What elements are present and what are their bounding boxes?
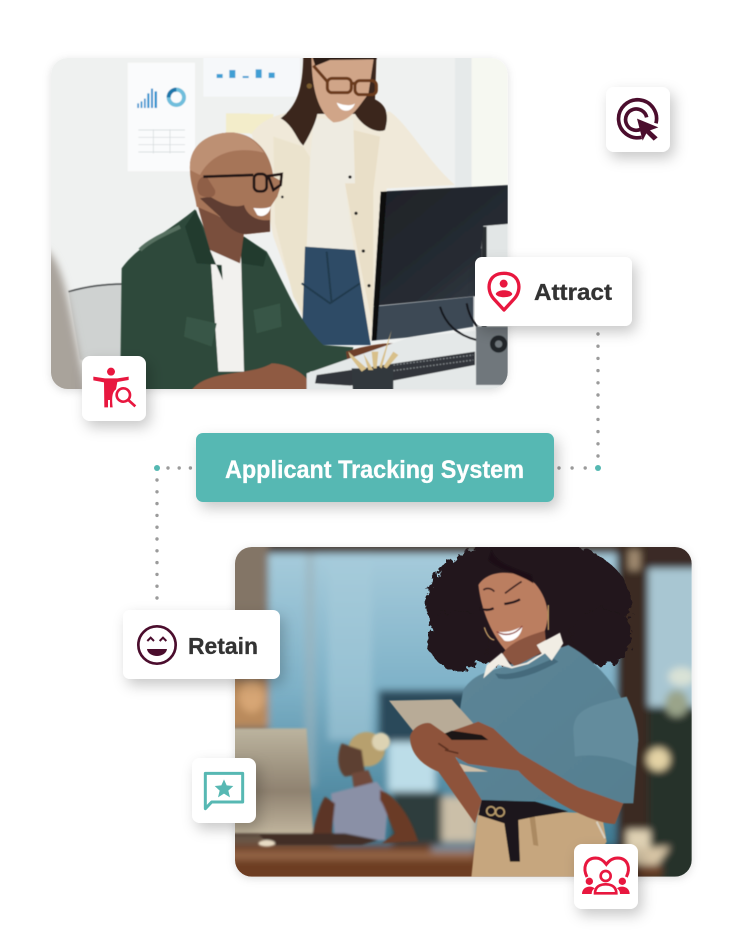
icon card: person with magnifier bbox=[82, 356, 146, 421]
desk and monitor bbox=[306, 184, 508, 389]
icon card: cursor target bbox=[606, 87, 670, 152]
icon card: star speech bubble bbox=[192, 758, 256, 823]
blurred office background bbox=[235, 547, 692, 877]
connector: left dotted line from system box to Retain bbox=[154, 465, 191, 608]
central box: Applicant Tracking System: Applicant Tracking System bbox=[225, 456, 524, 484]
photo: man and woman at a computer bbox=[40, 50, 523, 400]
chair bbox=[68, 284, 123, 360]
label card: Retain bbox=[123, 610, 280, 679]
wall poster with charts bbox=[128, 63, 195, 171]
blurred monitor bbox=[235, 727, 315, 836]
icon card: heart with team bbox=[574, 844, 638, 909]
label card: Retain: Retain bbox=[188, 633, 258, 659]
woman bbox=[389, 550, 638, 890]
connector: right dotted line from Attract to system box bbox=[559, 326, 601, 471]
man bbox=[120, 132, 393, 389]
label card: Attract: Attract bbox=[534, 279, 612, 305]
central box: Applicant Tracking System bbox=[196, 433, 554, 502]
sticky notes bbox=[226, 113, 273, 134]
woman's hair bbox=[426, 538, 632, 670]
window bbox=[456, 58, 470, 187]
blurred colleague bbox=[258, 732, 418, 847]
label card: Attract bbox=[475, 257, 632, 326]
icon: location pin with person bbox=[489, 273, 519, 310]
photo: woman with a tablet bbox=[232, 546, 694, 882]
icon: smiling face bbox=[138, 626, 176, 664]
wall poster with bars bbox=[204, 58, 300, 96]
woman bbox=[252, 50, 455, 345]
